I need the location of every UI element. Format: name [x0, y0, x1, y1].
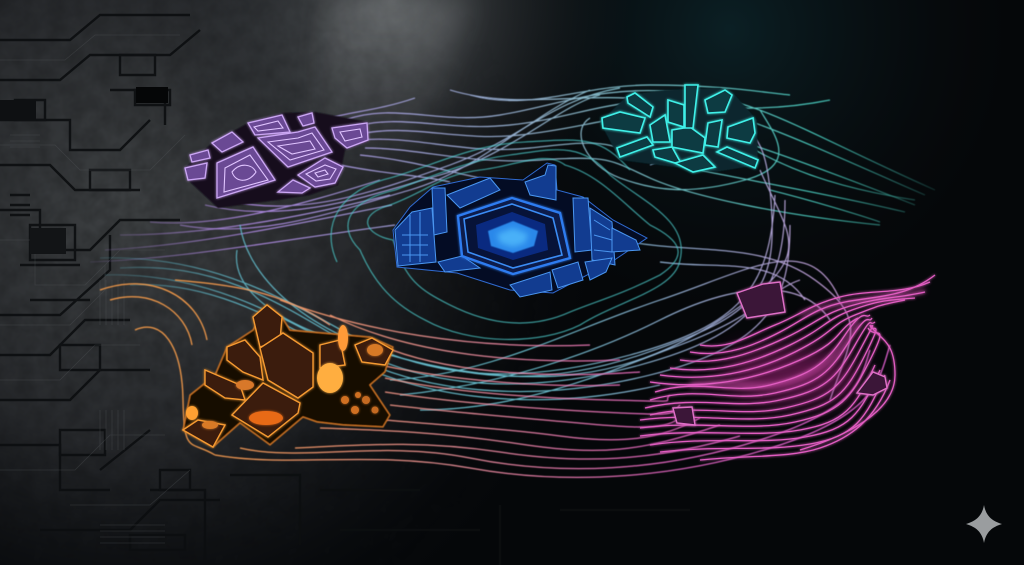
magenta wave bundle: [640, 275, 935, 460]
island: cyan city: [600, 85, 758, 172]
hub hexagon core: [458, 198, 570, 274]
icon: sparkle watermark: [966, 505, 1002, 543]
flow lines: purple to cyan streams: [90, 85, 935, 262]
island: orange city: [183, 305, 393, 447]
circuit board pattern on the left: [0, 15, 690, 565]
fire glows: [186, 325, 383, 429]
island: magenta small blocks: [673, 282, 887, 425]
flow lines: cyan streams across the middle: [100, 130, 851, 410]
icon: block right: [857, 372, 887, 395]
icon: block bottom: [673, 407, 695, 425]
island: purple terrain: [185, 112, 368, 208]
circuit fine lines: [0, 35, 190, 543]
icon: block top: [737, 282, 785, 318]
flow lines: orange to magenta streams: [100, 280, 890, 477]
flow lines: contours around the blue hub: [331, 140, 681, 339]
island: blue central hub: [393, 163, 647, 297]
